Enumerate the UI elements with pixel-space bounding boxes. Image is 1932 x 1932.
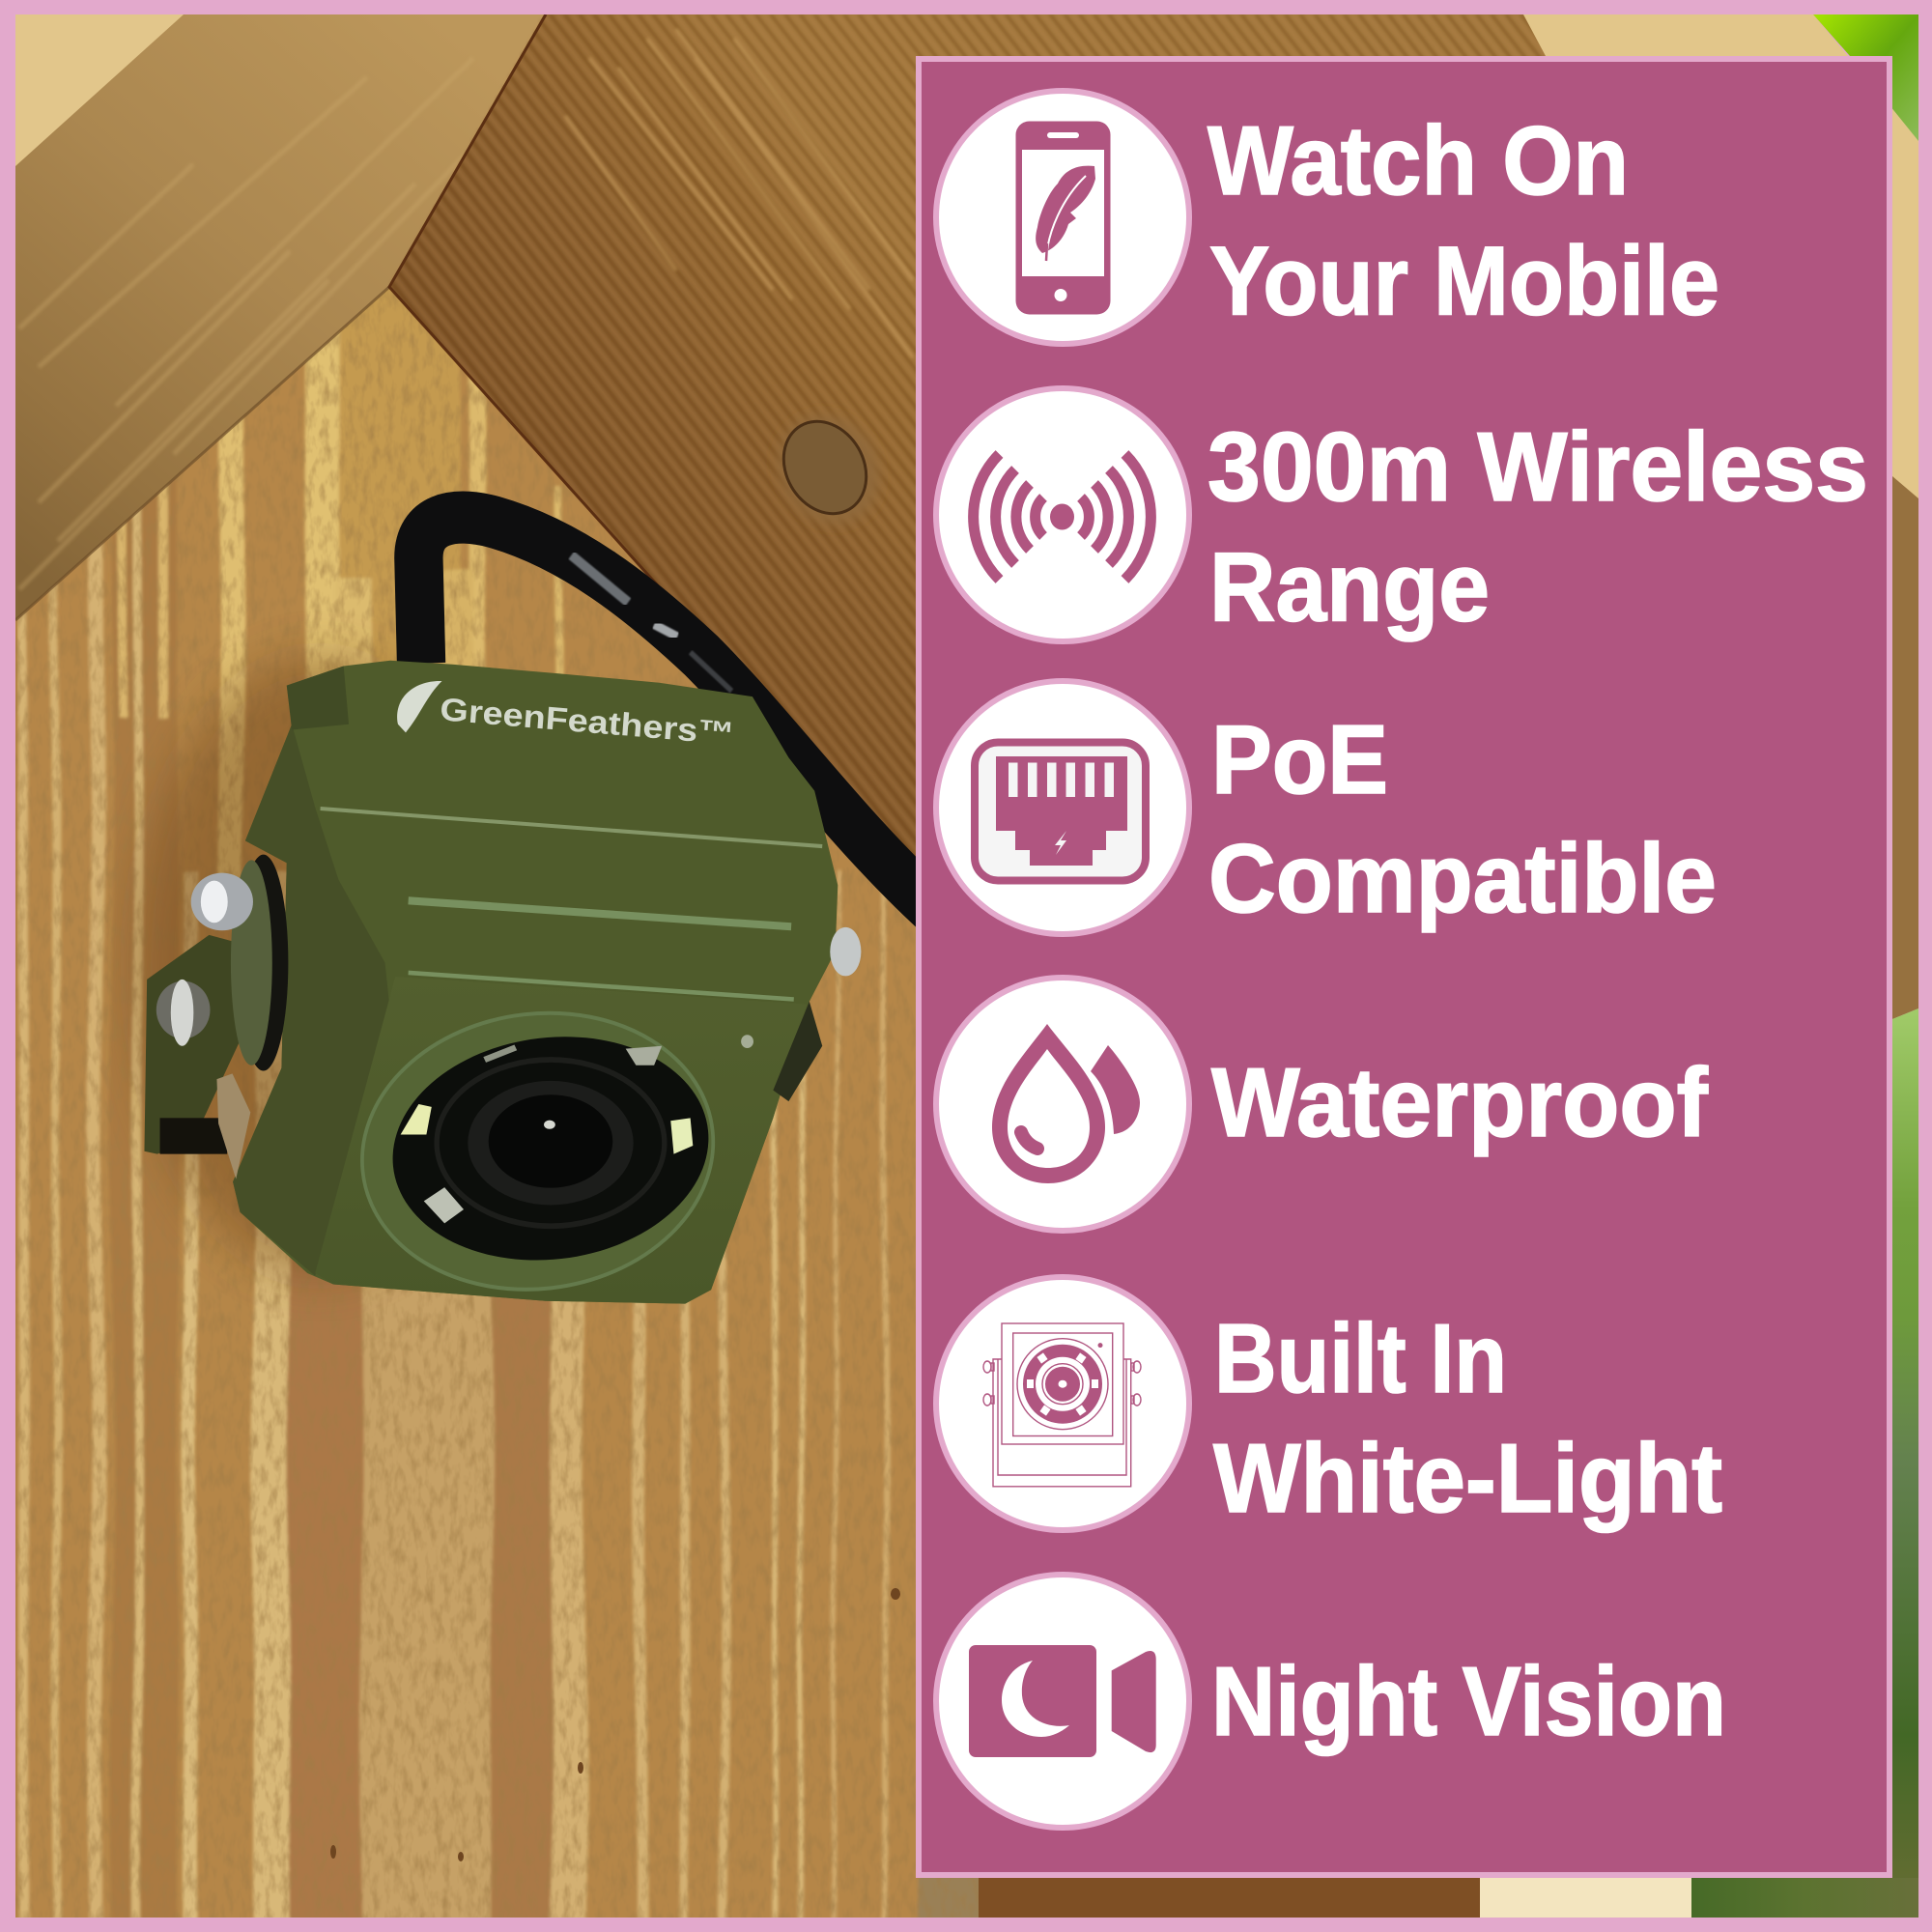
label	[1208, 107, 1719, 336]
icon: water drops	[936, 978, 1189, 1231]
feature: watch on your mobile	[936, 91, 1719, 344]
label	[1208, 413, 1868, 641]
knot marks on the board	[330, 1588, 900, 1861]
logo on camera top	[397, 681, 730, 742]
label: Range	[1209, 533, 1490, 641]
feature: 300m wireless range	[936, 388, 1868, 641]
label: Waterproof	[1211, 1049, 1708, 1157]
mounting screws	[156, 873, 861, 1101]
black cable	[418, 518, 944, 919]
blurred shadow from the camera	[124, 637, 386, 1291]
feature: PoE compatible	[936, 681, 1717, 934]
label: Compatible	[1208, 825, 1717, 933]
green foliage strip, bottom	[1691, 1878, 1918, 1918]
label	[1213, 1305, 1722, 1533]
side disc and paper tag	[216, 855, 288, 1179]
brown wood strip, bottom	[979, 1878, 1480, 1918]
brown wood strip, right	[1892, 476, 1918, 1019]
cream wood strip, bottom	[1480, 1878, 1691, 1918]
label: Watch On	[1208, 107, 1629, 215]
icon: video camera with moon	[936, 1575, 1189, 1828]
icon: wireless signal	[936, 388, 1189, 641]
feature: built in white-light	[936, 1277, 1722, 1533]
label: Your Mobile	[1209, 228, 1719, 336]
leaf background, top right	[1813, 14, 1918, 141]
label: PoE	[1211, 706, 1388, 814]
feature: night vision	[936, 1575, 1726, 1828]
camera body	[233, 661, 838, 1304]
icon: ethernet port	[936, 681, 1189, 934]
upper left angled beam	[15, 14, 547, 620]
wooden back board with vertical grain	[15, 261, 991, 1932]
label	[1208, 706, 1717, 933]
feature: waterproof	[936, 978, 1708, 1231]
light beam corner	[15, 14, 184, 166]
light wood strip, top right	[1523, 14, 1918, 498]
left mounting bracket	[145, 935, 239, 1154]
label: Night Vision	[1211, 1648, 1726, 1756]
icon: phone with feather	[936, 91, 1189, 344]
camera photo	[144, 518, 944, 1308]
dark grooved beam	[389, 14, 1546, 927]
green foliage strip, right	[1892, 1009, 1918, 1918]
lens assembly	[360, 1010, 753, 1292]
label: White-Light	[1213, 1425, 1722, 1533]
icon: camera line drawing	[936, 1277, 1189, 1530]
label: 300m Wireless	[1208, 413, 1868, 522]
label: Built In	[1214, 1305, 1507, 1413]
knot plug on the beam	[778, 415, 879, 525]
panel: feature list	[919, 59, 1889, 1875]
logo on camera top: GreenFeathers™	[439, 691, 735, 752]
